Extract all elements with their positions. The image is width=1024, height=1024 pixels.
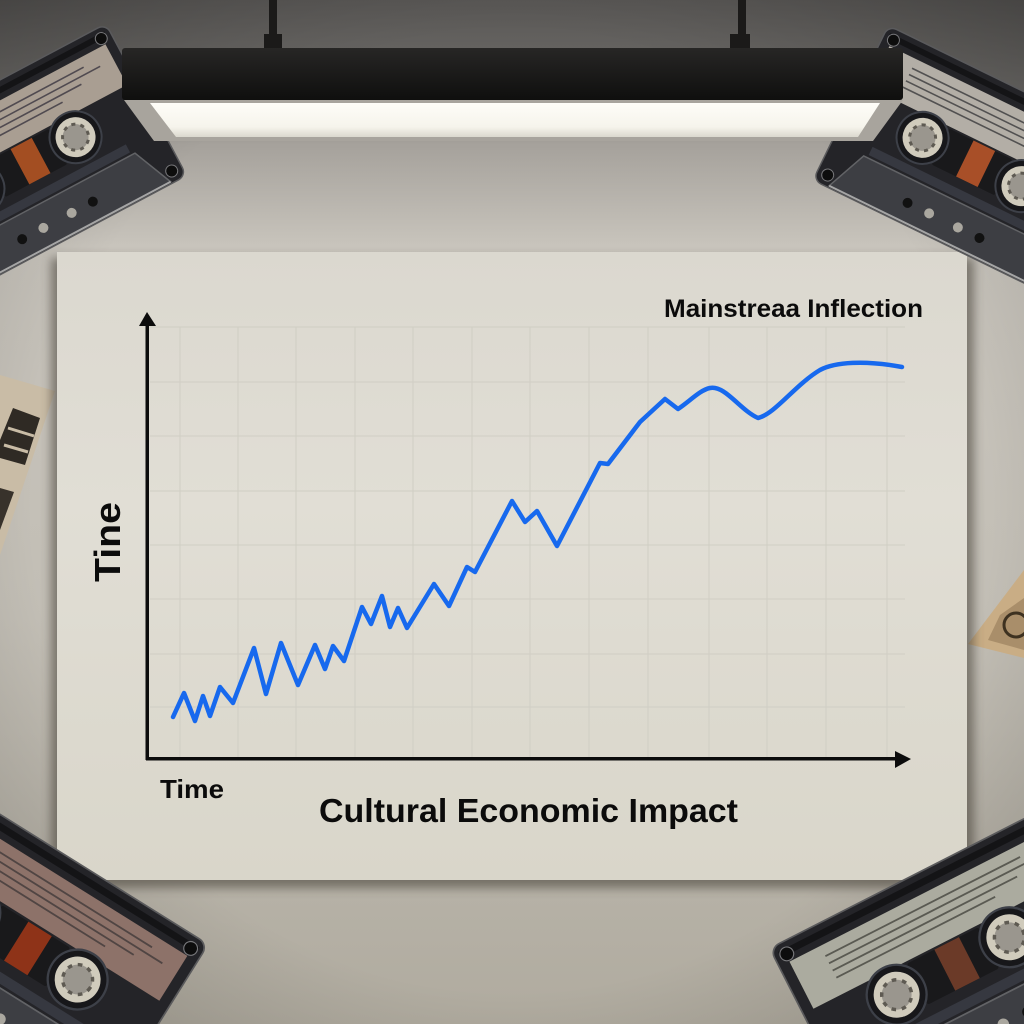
lamp glowing lens	[150, 103, 880, 137]
lamp mounting stems	[264, 0, 750, 49]
x axis title: Cultural Economic Impact	[319, 792, 738, 829]
vertical axis with arrow	[139, 312, 156, 760]
blue trend line	[173, 363, 902, 721]
chart grid	[150, 327, 905, 757]
y axis title: Tine	[87, 502, 128, 582]
torn paper scrap: left	[0, 375, 55, 555]
paper shadow	[51, 258, 974, 888]
x axis start label: Time	[160, 774, 224, 804]
ceiling lamp	[122, 0, 903, 141]
horizontal axis with arrow	[146, 751, 911, 768]
cassette: bottom left	[0, 780, 208, 1024]
cassette: bottom right	[770, 807, 1024, 1024]
cassette: top left	[0, 24, 187, 302]
torn paper scrap: right	[968, 570, 1024, 658]
chart paper panel	[57, 252, 967, 880]
annotation: mainstream inflection: Mainstreaa Inflection	[664, 295, 923, 323]
cassette: top right	[813, 26, 1024, 298]
line chart	[139, 312, 911, 768]
lamp housing bar	[122, 48, 903, 100]
lamp diffuser frame	[124, 100, 903, 141]
